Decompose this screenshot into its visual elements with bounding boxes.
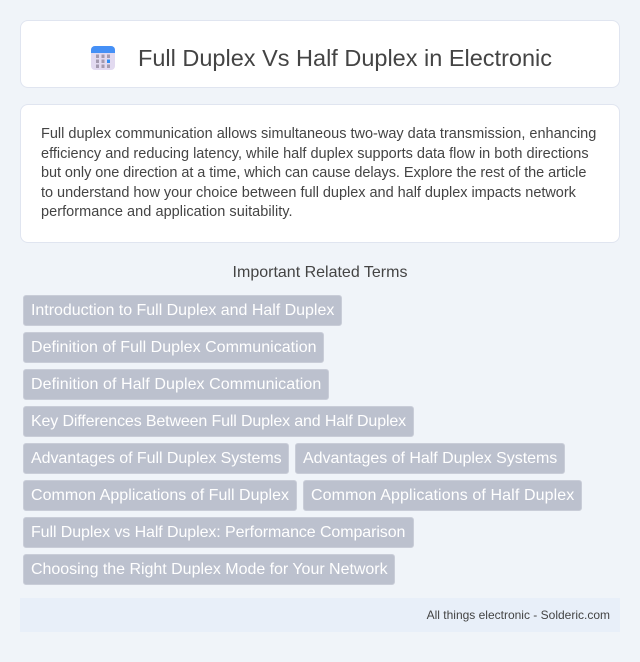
intro text: efficiency and reducing latency, while half duplex supports data flow in both directions — [41, 146, 589, 162]
intro text: Full duplex communication allows simultaneous two-way data transmission, enhancing — [41, 126, 596, 142]
intro text: but only one direction at a time, which can cause delays. Explore the rest of the article — [41, 165, 586, 181]
tag: choosing — [23, 554, 395, 585]
tag: applications half: Common Applications of Half Duplex — [311, 487, 574, 504]
title: Full Duplex Vs Half Duplex in Electronic — [138, 45, 552, 71]
tag: advantages half — [295, 443, 565, 474]
tag: advantages full: Advantages of Full Duplex Systems — [31, 450, 282, 467]
tag: advantages full — [23, 443, 289, 474]
tag: applications half — [303, 480, 582, 511]
tag: advantages half: Advantages of Half Duplex Systems — [303, 450, 557, 467]
intro text: to understand how your choice between full duplex and half duplex impacts network — [41, 184, 576, 200]
intro text — [41, 126, 596, 220]
section heading: Important Related Terms — [233, 264, 407, 281]
intro card — [20, 104, 620, 243]
tag: introduction — [23, 295, 342, 326]
tag: choosing: Choosing the Right Duplex Mode for Your Network — [31, 561, 388, 578]
tag: key differences: Key Differences Between Full Duplex and Half Duplex — [31, 413, 406, 430]
header card — [20, 20, 620, 88]
tag: definition full: Definition of Full Duplex Communication — [31, 339, 317, 356]
icon: calendar grid — [91, 46, 115, 70]
tag list — [23, 295, 582, 585]
footer text: All things electronic - Solderic.com — [427, 608, 610, 622]
footer bar — [20, 598, 620, 632]
tag: applications full: Common Applications of Full Duplex — [31, 487, 289, 504]
tag: applications full — [23, 480, 297, 511]
tag: performance — [23, 517, 414, 548]
intro text: performance and application suitability. — [41, 204, 293, 220]
tag: key differences — [23, 406, 414, 437]
tag: definition full — [23, 332, 324, 363]
tag: definition half: Definition of Half Duplex Communication — [31, 376, 321, 393]
tag: performance: Full Duplex vs Half Duplex: Performance Comparison — [31, 524, 405, 541]
tag: definition half — [23, 369, 329, 400]
tag: introduction: Introduction to Full Duplex and Half Duplex — [31, 302, 334, 319]
